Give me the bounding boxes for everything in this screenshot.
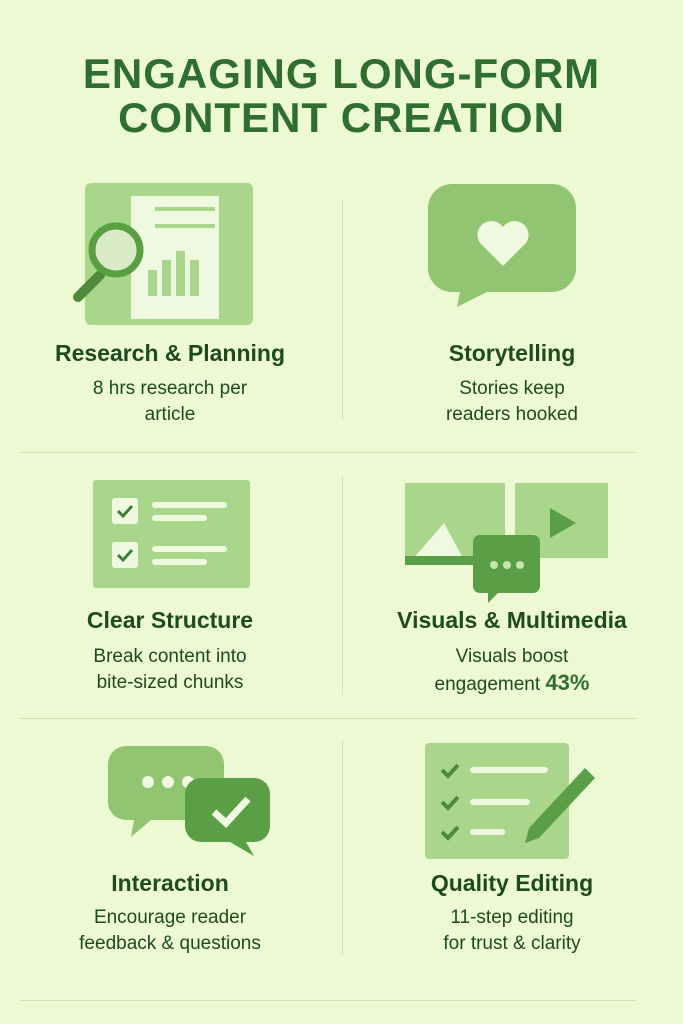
text [93,646,247,693]
heading: Quality Editing [431,870,593,896]
text: 8 hrs research per [93,378,247,399]
text: Encourage reader [94,907,246,928]
text: for trust & clarity [443,933,581,954]
panel: structure [87,480,253,693]
text: readers hooked [446,404,578,425]
heading: Clear Structure [87,607,253,633]
icon: research [73,183,253,325]
panel: visuals [397,483,627,695]
text: Stories keep [459,378,565,399]
icon: media [405,483,608,603]
heading: Interaction [111,870,229,896]
text [435,646,589,695]
text: 11-step editing [450,907,574,928]
heading: Research & Planning [55,340,285,366]
text [93,378,247,425]
title [83,50,600,141]
text [446,378,578,425]
panel: storytelling [428,184,578,425]
text: Visuals boost [456,646,568,667]
panel: interaction [79,746,270,954]
title: ENGAGING LONG-FORM [83,50,600,97]
panel: research [55,183,285,425]
title: CONTENT CREATION [118,94,565,141]
icon: checklist [93,480,250,588]
text [443,907,581,954]
icon: heart bubble [428,184,576,307]
icon: chat bubbles [108,746,270,856]
text: article [145,404,195,425]
heading: Storytelling [449,340,575,366]
text: feedback & questions [79,933,261,954]
text: Break content into [93,646,247,667]
icon: editing [425,743,595,859]
text: bite-sized chunks [97,672,243,693]
text: engagement 43% [435,670,589,695]
text [79,907,261,954]
heading: Visuals & Multimedia [397,607,627,633]
panel: quality [425,743,595,954]
